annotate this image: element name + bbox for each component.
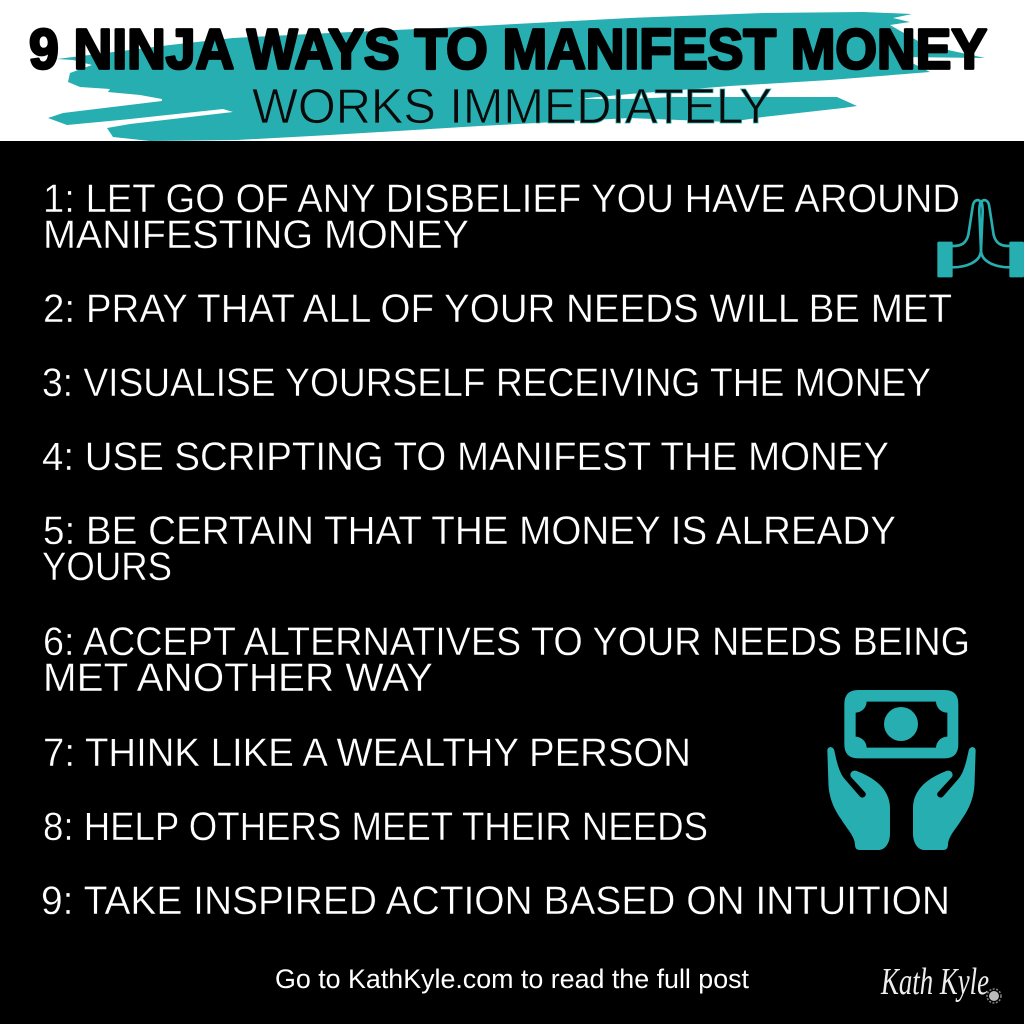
item 5: 5: BE CERTAIN THAT THE MONEY IS ALREADY — [43, 509, 896, 553]
item 1: MANIFESTING MONEY — [43, 213, 469, 257]
icon: mandala flower — [987, 989, 1001, 1003]
banknote — [844, 690, 958, 758]
item 9: 9: TAKE INSPIRED ACTION BASED ON INTUITION — [41, 879, 950, 923]
right hand — [913, 747, 976, 850]
icon: hands holding money — [827, 690, 976, 850]
item 1: 1: LET GO OF ANY DISBELIEF YOU HAVE AROUND — [43, 177, 960, 221]
item 1 — [43, 177, 960, 257]
footer call to action: Go to KathKyle.com to read the full post — [275, 964, 749, 994]
header brush stroke — [48, 12, 985, 141]
item 8: 8: HELP OTHERS MEET THEIR NEEDS — [43, 805, 708, 849]
left hand — [827, 747, 890, 850]
subtitle: WORKS IMMEDIATELY — [252, 80, 772, 134]
item 2: 2: PRAY THAT ALL OF YOUR NEEDS WILL BE MET — [43, 287, 952, 331]
item 6: 6: ACCEPT ALTERNATIVES TO YOUR NEEDS BEING — [43, 620, 970, 664]
item 7: 7: THINK LIKE A WEALTHY PERSON — [43, 731, 691, 775]
item 6: MET ANOTHER WAY — [43, 656, 433, 700]
icon: praying hands — [937, 200, 1024, 277]
list of nine ways — [41, 177, 970, 923]
item 5 — [42, 509, 896, 589]
item 3: 3: VISUALISE YOURSELF RECEIVING THE MONEY — [42, 361, 931, 405]
title: 9 NINJA WAYS TO MANIFEST MONEY — [29, 18, 987, 82]
item 6 — [43, 620, 970, 700]
item 4: 4: USE SCRIPTING TO MANIFEST THE MONEY — [42, 435, 889, 479]
item 5: YOURS — [42, 545, 172, 589]
